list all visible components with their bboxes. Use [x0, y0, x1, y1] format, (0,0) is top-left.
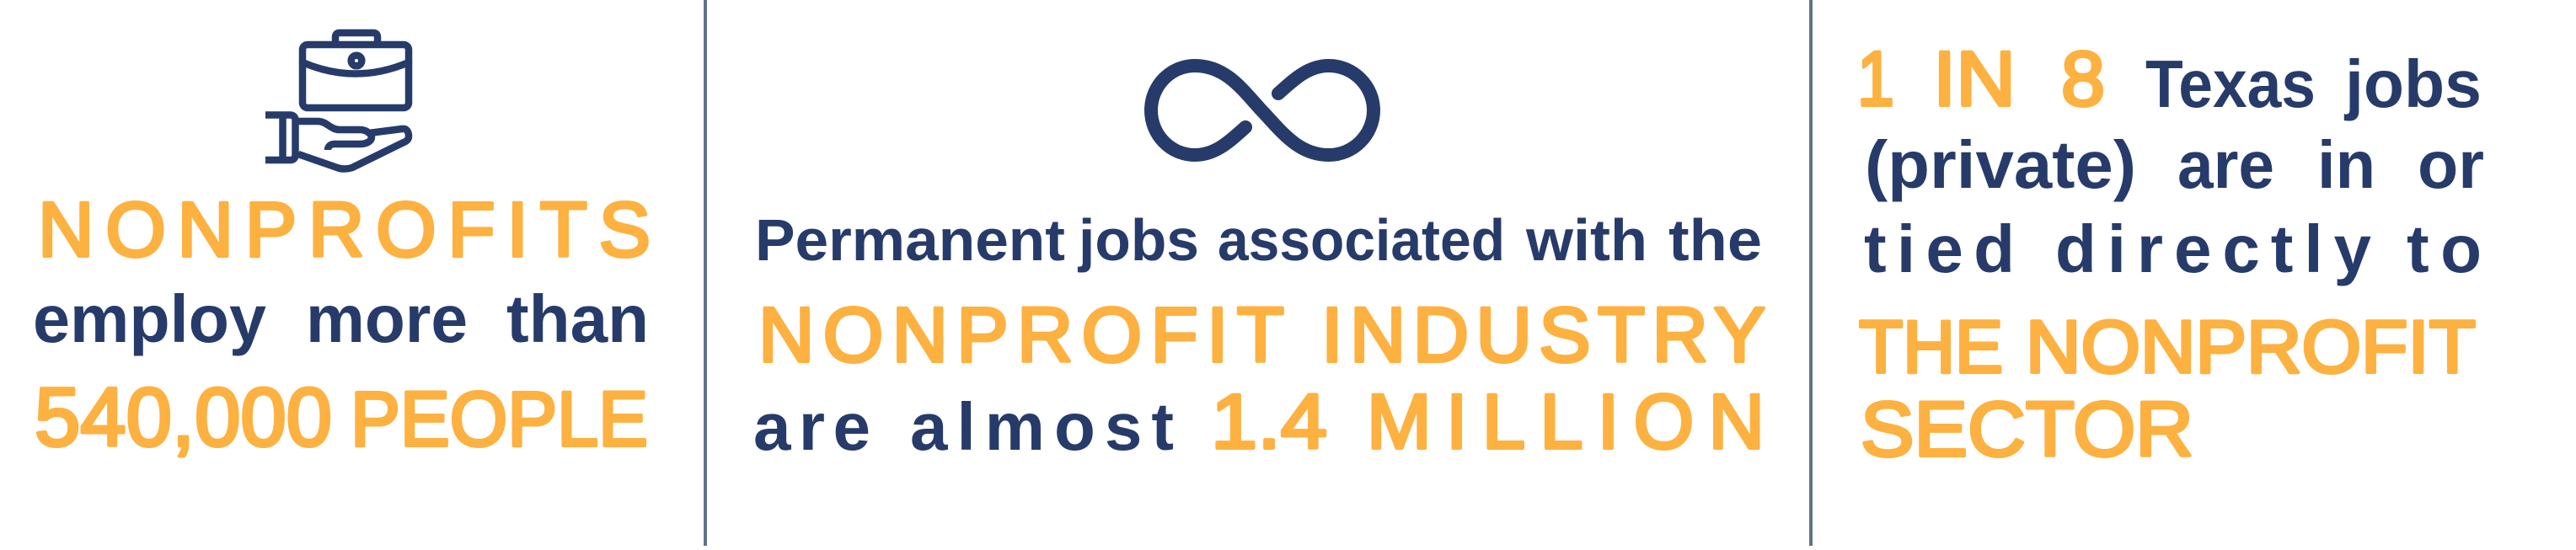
heading: the nonprofit sector: THE	[1859, 305, 2003, 388]
heading: NONPROFITS: NONPROFITS	[38, 187, 651, 273]
statistic: 1.4 million: MILLION	[1367, 379, 1765, 465]
statistic: 1 in 8: 8	[2061, 36, 2105, 122]
icon: infinity	[1151, 66, 1374, 155]
text: Texas jobs (private) are in or tied directly to: are	[2177, 127, 2274, 202]
text: Texas jobs (private) are in or tied directly to: tied	[1864, 211, 2015, 286]
statistic: 540,000 people: PEOPLE	[351, 376, 648, 462]
text: Texas jobs (private) are in or tied directly to: or	[2418, 127, 2484, 202]
statistic: 1 in 8: 1	[1857, 36, 1894, 122]
heading: nonprofit industry: NONPROFIT	[758, 292, 1284, 378]
text: are almost	[753, 389, 1174, 464]
text: permanent jobs associated with the: Permanent	[755, 207, 1065, 273]
text: Texas jobs (private) are in or tied directly to: Texas	[2145, 46, 2316, 121]
text: employ more than: than	[506, 281, 649, 356]
panel: nonprofit employment	[33, 33, 651, 463]
text: Texas jobs (private) are in or tied directly to: to	[2407, 211, 2482, 286]
text: permanent jobs associated with the: with	[1525, 207, 1647, 273]
statistic: 1 in 8: IN	[1933, 36, 2016, 122]
text: permanent jobs associated with the: jobs	[1077, 207, 1199, 273]
statistic: 540,000 people	[35, 371, 648, 463]
text: permanent jobs associated with the	[755, 207, 1762, 273]
heading: nonprofit industry	[758, 292, 1765, 378]
text: permanent jobs associated with the: associated	[1218, 207, 1505, 273]
divider: left	[704, 0, 707, 546]
statistic: 1 in 8	[1857, 36, 2105, 122]
text: employ more than: more	[306, 281, 468, 356]
text: Texas jobs (private) are in or tied directly to: (private)	[1865, 127, 2136, 202]
heading: the nonprofit sector	[1859, 305, 2476, 473]
text: Texas jobs (private) are in or tied directly to	[1864, 46, 2484, 286]
text: employ more than	[33, 281, 649, 356]
statistic: 1.4 million: 1.4	[1211, 379, 1327, 465]
panel: 1 in 8 Texas jobs	[1857, 36, 2484, 473]
icon: briefcase held over open hand	[265, 33, 409, 168]
divider: right	[1809, 0, 1813, 546]
statistic: 540,000 people: 540,000	[35, 371, 332, 463]
text: Texas jobs (private) are in or tied directly to: jobs	[2343, 46, 2482, 121]
text: Texas jobs (private) are in or tied directly to: directly	[2055, 211, 2371, 286]
heading: nonprofit industry: INDUSTRY	[1321, 292, 1765, 378]
text: employ more than: employ	[33, 281, 267, 356]
text: are almost: almost	[910, 389, 1174, 464]
panel: permanent jobs	[753, 66, 1765, 465]
text: permanent jobs associated with the: the	[1668, 207, 1762, 273]
heading: the nonprofit sector: NONPROFIT	[2026, 305, 2476, 388]
heading: the nonprofit sector: SECTOR	[1861, 387, 2193, 473]
text: Texas jobs (private) are in or tied directly to: in	[2317, 127, 2375, 202]
text: are almost: are	[753, 389, 870, 464]
